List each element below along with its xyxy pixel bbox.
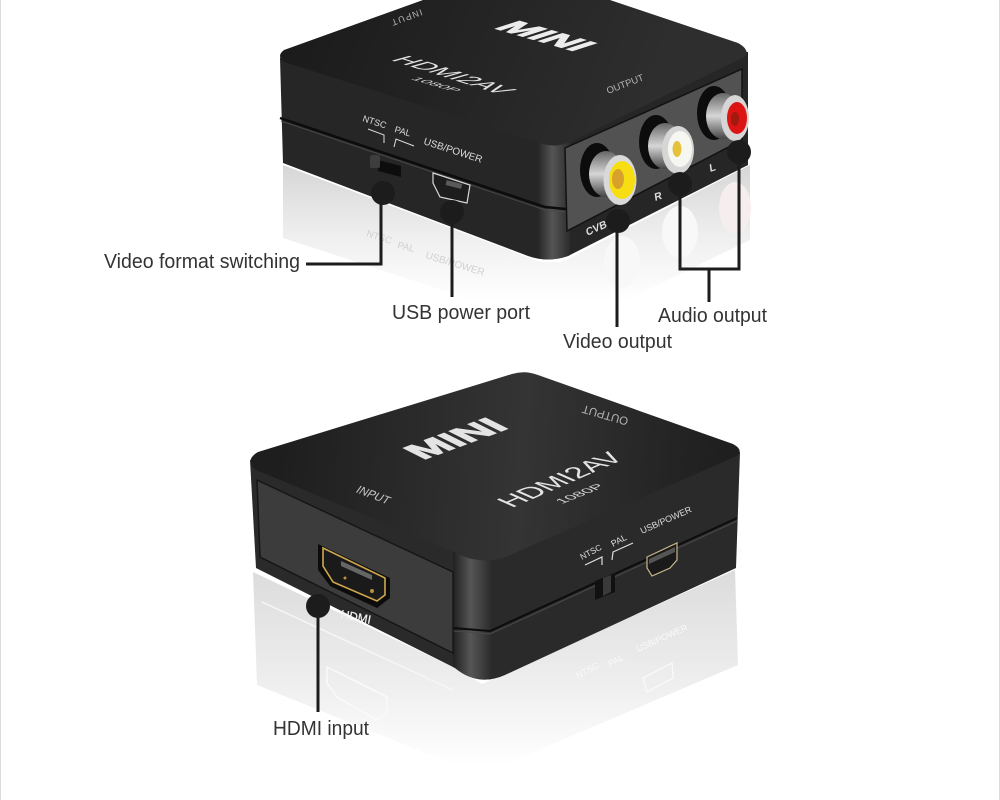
bottom device: HDMI2AV converter: 1080P [552,483,609,505]
callout: video output [563,209,672,353]
top device: HDMI2AV converter: 1080P [408,76,465,93]
bottom device: HDMI2AV converter [250,372,740,690]
HDMI2AV logo: HDMI2AV [384,54,524,96]
top device: HDMI2AV converter: INPUT [390,7,424,28]
bottom device: HDMI2AV converter: PAL [609,532,628,549]
RCA red [697,86,749,141]
top device reflection [283,165,751,330]
top device: HDMI2AV converter: OUTPUT [605,72,646,97]
seam line [453,518,737,631]
slide switch [595,573,615,600]
callout: video format switching [104,181,395,273]
HDMI port [318,544,390,608]
RCA white [639,115,694,174]
mini USB port [647,543,677,576]
callout: HDMI input: HDMI input [273,718,369,740]
top device: HDMI2AV converter: L [709,161,717,175]
output panel [565,69,742,231]
top device: HDMI2AV converter [280,0,749,265]
callout: audio output [658,140,767,327]
bottom device reflection: USB/POWER [635,622,690,654]
top face [250,372,740,560]
RCA yellow [580,143,636,205]
bottom device reflection [253,570,738,775]
bottom device: HDMI2AV converter: OUTPUT [581,402,630,427]
bottom device: HDMI2AV converter: INPUT [353,484,393,507]
top device: HDMI2AV converter: PAL [393,124,412,138]
top device: HDMI2AV converter: USB/POWER [422,136,484,166]
top device reflection: USB/POWER [424,250,486,279]
MINI logo: MINI [395,414,517,464]
callout: HDMI input [273,594,369,740]
top device: HDMI2AV converter: R [654,190,663,204]
bottom device reflection: PAL [606,652,625,669]
HDMI2AV logo: HDMI2AV [490,449,631,510]
bottom device reflection: NTSC [574,660,601,681]
bottom device: HDMI2AV converter: USB/POWER [639,504,694,536]
HDMI label: HDMI [339,607,372,627]
slide switch [378,160,401,177]
top face [280,0,747,146]
callout: USB power port [392,200,530,324]
body silhouette [250,452,740,680]
callout: audio output: Audio output [658,305,767,327]
callout: USB power port: USB power port [392,302,530,324]
callout: video output: Video output [563,331,672,353]
channel labels: CVBS [585,215,614,239]
mini USB port [433,173,470,203]
input panel [257,480,453,653]
callout: video format switching: Video format switching [104,251,300,273]
MINI logo: MINI [485,18,606,54]
top device reflection: NTSC [365,228,393,247]
corner highlight [453,550,492,690]
corner highlight [538,135,570,265]
seam line [280,118,566,209]
switch labels: NTSC [361,113,388,131]
top device reflection: PAL [396,240,416,255]
body silhouette [280,52,748,260]
switch labels: NTSC [578,542,603,562]
